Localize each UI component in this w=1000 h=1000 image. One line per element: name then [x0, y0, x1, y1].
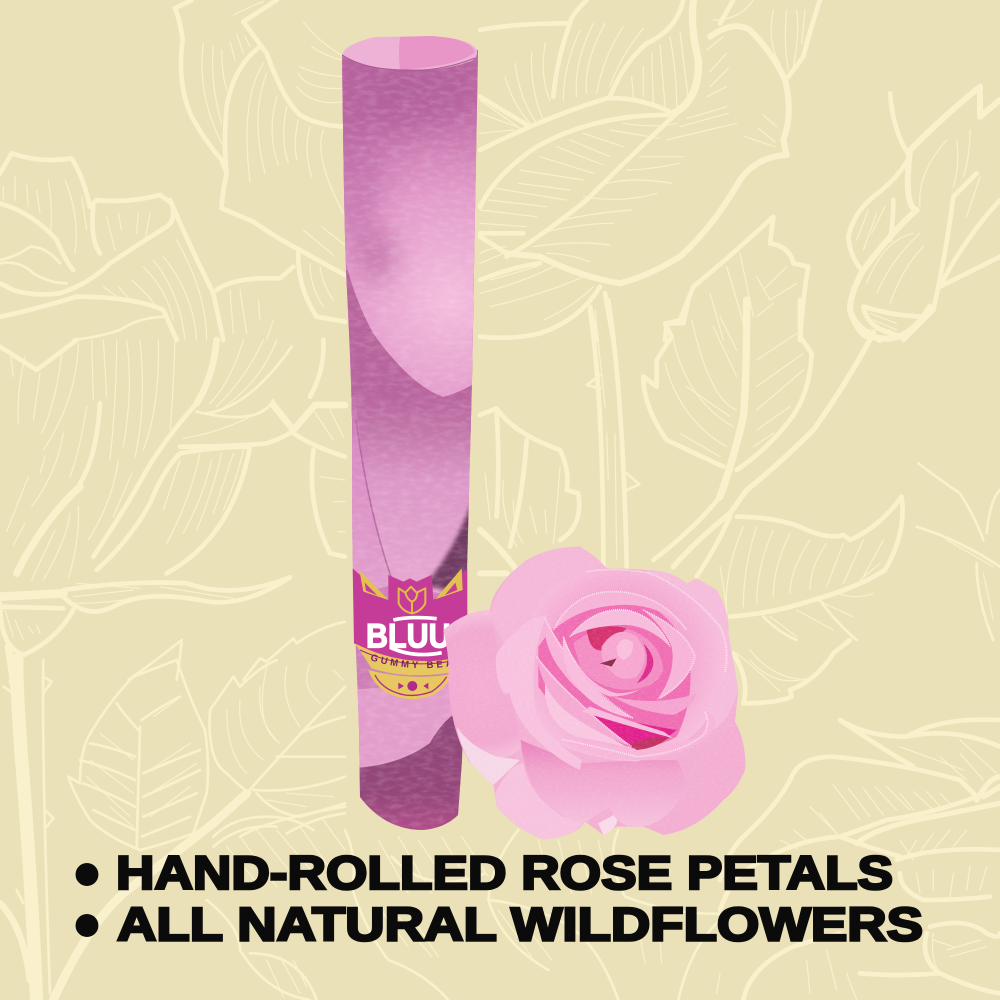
bottom-right rose line art	[717, 640, 1000, 1000]
left folded petal	[496, 615, 582, 770]
small pale petal	[598, 813, 617, 835]
petal left sweep	[537, 657, 632, 747]
gummy bears text: GUMMY BEARS	[371, 654, 448, 668]
paper grain	[342, 56, 478, 830]
top-left rose line art	[0, 0, 345, 340]
left large petal	[443, 610, 522, 763]
bottom-right petal	[643, 722, 745, 835]
bullet item one: •	[73, 829, 101, 918]
pale crescent	[545, 677, 627, 747]
dark fold	[428, 502, 469, 592]
second petal	[351, 395, 472, 594]
tube body	[342, 50, 478, 830]
petal mid sweep	[545, 618, 617, 712]
rose silhouette	[443, 547, 745, 839]
middle dark band	[346, 270, 474, 436]
gold ribbon	[355, 643, 467, 675]
outer ring petal	[522, 570, 728, 762]
brand overlines	[390, 618, 442, 655]
bottom-left petal	[495, 763, 585, 839]
bullet item two: •	[73, 880, 101, 969]
right lower petal	[560, 710, 715, 760]
top inner arc	[553, 592, 687, 630]
central swirl	[573, 628, 663, 690]
upper petal shadows	[388, 103, 448, 132]
petal grain	[449, 578, 740, 828]
lower pink section	[358, 682, 452, 768]
lower deep crevice	[580, 710, 677, 748]
tulip logo icon	[399, 587, 425, 613]
bottom-centre petals line art	[345, 830, 728, 1000]
left petal strip	[351, 395, 388, 589]
back petal right	[647, 570, 738, 730]
tube top opening	[342, 36, 477, 70]
upper petal	[340, 50, 480, 397]
pink rose	[440, 543, 750, 843]
dewy lower-left petal	[457, 727, 520, 785]
mid-left rose line art	[0, 340, 345, 680]
back petal top-left	[490, 547, 607, 645]
rolled rose petal tube	[342, 36, 478, 830]
bullet item one: HAND-ROLLED ROSE PETALS	[116, 846, 893, 899]
gold wings	[359, 568, 463, 600]
top-right rose line art	[480, 0, 1000, 340]
lower dark petal	[360, 716, 462, 830]
right inner curl	[582, 707, 673, 738]
left inner crescent	[563, 637, 633, 718]
bottom-left stem and leaves line art	[0, 660, 345, 1000]
medallion	[368, 670, 454, 699]
bullet item one	[73, 829, 893, 918]
label band	[353, 568, 467, 663]
product label	[352, 568, 476, 700]
brand word: BLUUM	[366, 617, 476, 655]
bottom centre petal	[521, 740, 684, 827]
bullet list	[73, 829, 923, 969]
inner bowl	[538, 597, 691, 747]
bullet item two: ALL NATURAL WILDFLOWERS	[117, 898, 923, 950]
bullet item two	[73, 880, 923, 969]
right-middle leaves line art	[480, 300, 1000, 640]
